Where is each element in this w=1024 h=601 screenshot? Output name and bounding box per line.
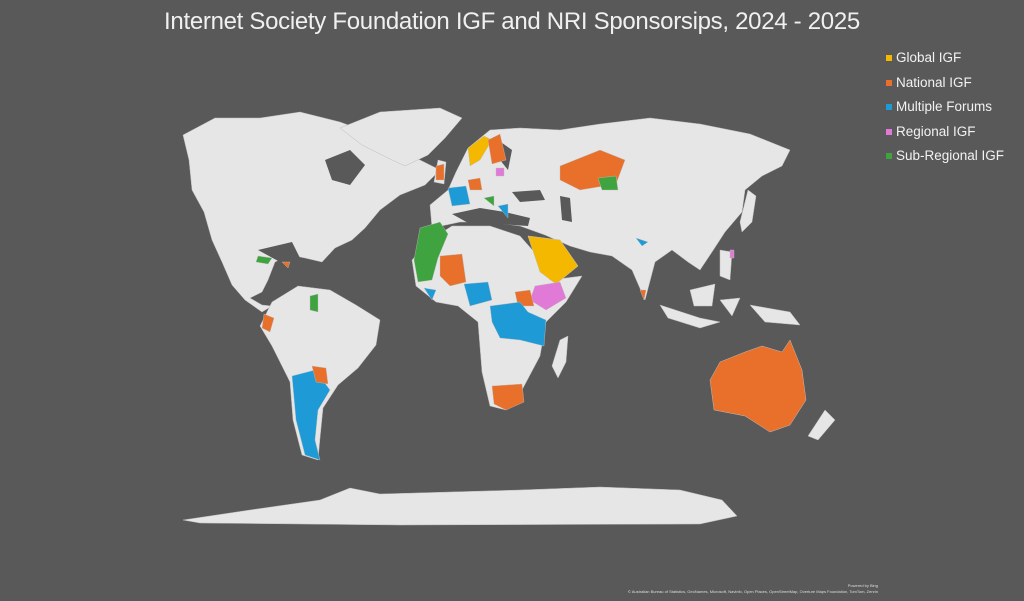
legend [886, 50, 1004, 163]
Indonesia & SE Asia islands [660, 305, 720, 328]
credits: © Australian Bureau of Statistics, GeoNames, Microsoft, Navinfo, Open Places, OpenStreetMap, Overture Maps Foundation, TomTom, Zenrin [628, 589, 878, 594]
legend: Multiple Forums [896, 99, 992, 114]
Antarctica [183, 487, 737, 525]
legend: Regional IGF [896, 124, 976, 138]
highlighted countries [256, 134, 734, 460]
legend: Sub-Regional IGF [896, 148, 1004, 163]
UK [434, 160, 446, 184]
Australia [710, 340, 806, 432]
credits: Powered by Bing [848, 583, 878, 588]
South America [260, 286, 380, 460]
title: Internet Society Foundation IGF and NRI Sponsorsips, 2024 - 2025 [164, 8, 860, 35]
seas (water cut-outs) [258, 140, 572, 262]
credits [628, 583, 878, 594]
North America [183, 112, 440, 312]
Madagascar [552, 336, 568, 378]
New Zealand [808, 410, 835, 440]
legend: National IGF [896, 74, 972, 90]
Japan [740, 190, 756, 232]
legend: Global IGF [896, 50, 961, 65]
Arabia [528, 236, 578, 284]
Africa [412, 226, 582, 410]
Eurasia [430, 118, 790, 300]
Greenland [340, 108, 462, 166]
